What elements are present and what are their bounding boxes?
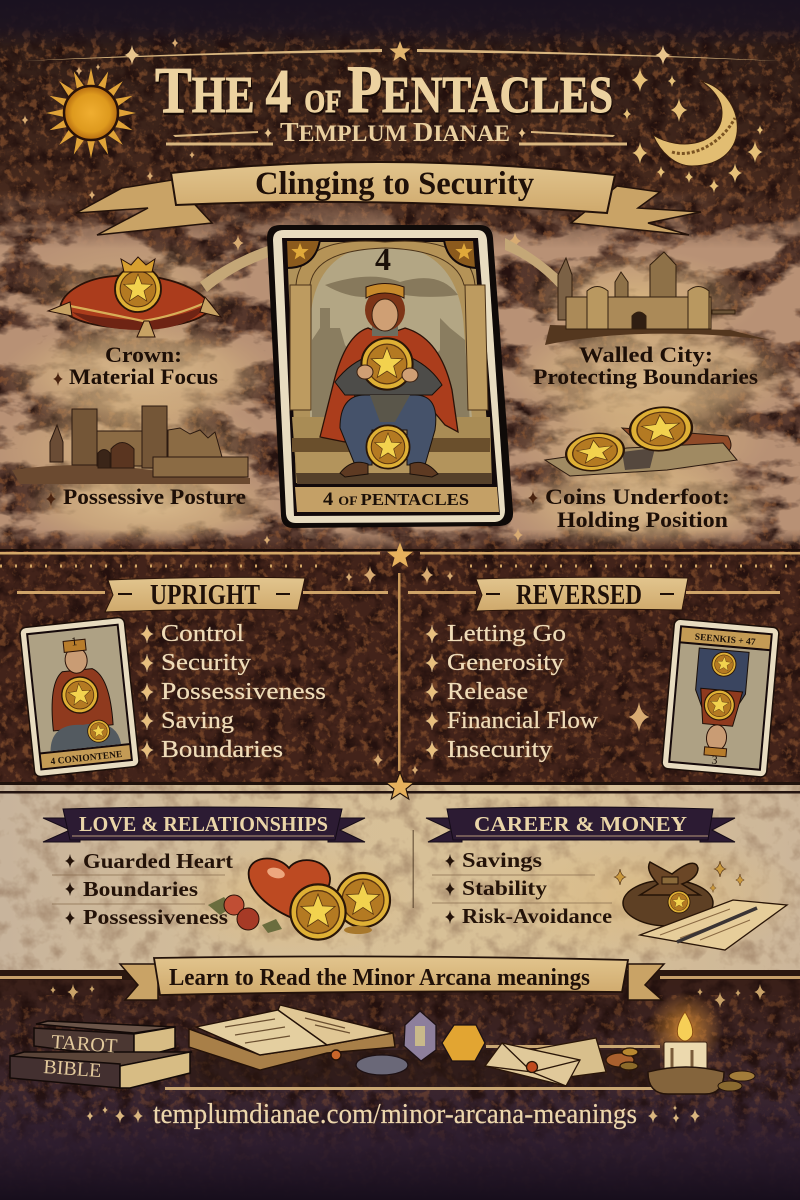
love list: Boundaries [83,877,198,901]
main tarot card [267,225,513,528]
reversed mini card: SEENKIS + 47 [694,633,756,648]
love list [52,849,234,929]
love list: Possessiveness [83,905,228,929]
icon: coin bag and paper [614,861,787,950]
upright list: Security [161,650,251,676]
panel: love and relationships [43,807,390,940]
love heading ribbon: LOVE & RELATIONSHIPS [79,812,328,836]
love heading ribbon [43,807,365,842]
arcs behind card [200,238,566,292]
icon: tarot and bible books [10,1021,192,1088]
sparkles beside banner [50,984,766,1008]
title: THE 4 OF PENTACLES [155,51,613,127]
illustration: ruined wall [12,406,250,484]
reversed list: Generosity [447,650,564,676]
shelf ledge [165,1045,660,1090]
career list: Stability [462,876,547,900]
icon: coins underfoot [545,405,737,476]
text: coins [528,484,730,532]
card label: 4 OF PENTACLES [323,489,469,510]
upright list: Possessiveness [161,679,326,705]
text: coins: Holding Position [557,507,728,532]
icon: open book [189,1005,395,1070]
star on divider [386,772,414,799]
footer url: templumdianae.com/minor-arcana-meanings [153,1099,637,1130]
subtitle [166,117,627,147]
text: walled city [533,342,758,389]
parchment band [0,782,800,980]
career list [432,848,612,928]
subtitle: TEMPLUM DIANAE [280,117,510,147]
upright list: Saving [161,708,234,734]
reversed list: Insecurity [447,737,552,763]
upright list: Boundaries [161,737,283,763]
upright list: Control [161,621,244,647]
text: walled city: Protecting Boundaries [533,364,758,389]
text: posture: Possessive Posture [63,484,246,509]
text: crown [53,342,218,389]
banner text: Learn to Read the Minor Arcana meanings [169,964,590,991]
upright heading [17,577,388,612]
icon: crystals and stone [356,1011,485,1075]
reversed list: Letting Go [447,621,566,647]
reversed heading: REVERSED [516,580,642,611]
book label tarot: TAROT [51,1031,118,1058]
panel: upright [17,577,388,777]
illustration: walled city [545,252,770,345]
icon: sealed letter [485,1038,638,1086]
banner: learn [0,956,800,1000]
reversed heading [408,577,780,611]
center divider stroke [412,830,414,908]
upright mini card [19,617,140,777]
reversed mini card: 3 [711,753,718,767]
text: crown: Crown: [105,342,182,367]
text: crown: Material Focus [69,364,218,389]
career heading ribbon: CAREER & MONEY [474,812,687,836]
reversed list: Release [447,679,528,705]
upright mini card: 1 [70,634,78,649]
reversed list [426,621,599,763]
seated figure [320,284,458,477]
reversed mini card [662,619,779,777]
icon: crown on red pillow [48,257,221,337]
card scene [287,241,492,484]
section divider [0,542,800,771]
tagline: Clinging to Security [255,166,534,202]
panel: reversed [408,577,780,777]
upright heading: UPRIGHT [150,580,260,611]
career list: Risk-Avoidance [462,904,612,928]
banner: subtitle ribbon [76,162,701,235]
panel: career and money [426,807,787,950]
top ornamental divider [22,41,780,65]
text: walled city: Walled City: [579,342,713,367]
icon: crescent moon [623,68,764,193]
upright list [141,621,326,763]
love list: Guarded Heart [83,849,234,873]
text: coins: Coins Underfoot: [545,484,730,509]
upright mini card: 4 CONIONTENE [50,750,123,767]
reversed list: Financial Flow [447,708,599,734]
icon: candle [647,992,755,1094]
scattered sparkles [22,38,650,775]
career heading ribbon [426,807,735,842]
card number: 4 [375,241,391,277]
icon: heart and coins [208,858,390,940]
book label bible: BIBLE [43,1056,102,1082]
icon: sun [46,68,136,158]
career list: Savings [462,848,542,872]
